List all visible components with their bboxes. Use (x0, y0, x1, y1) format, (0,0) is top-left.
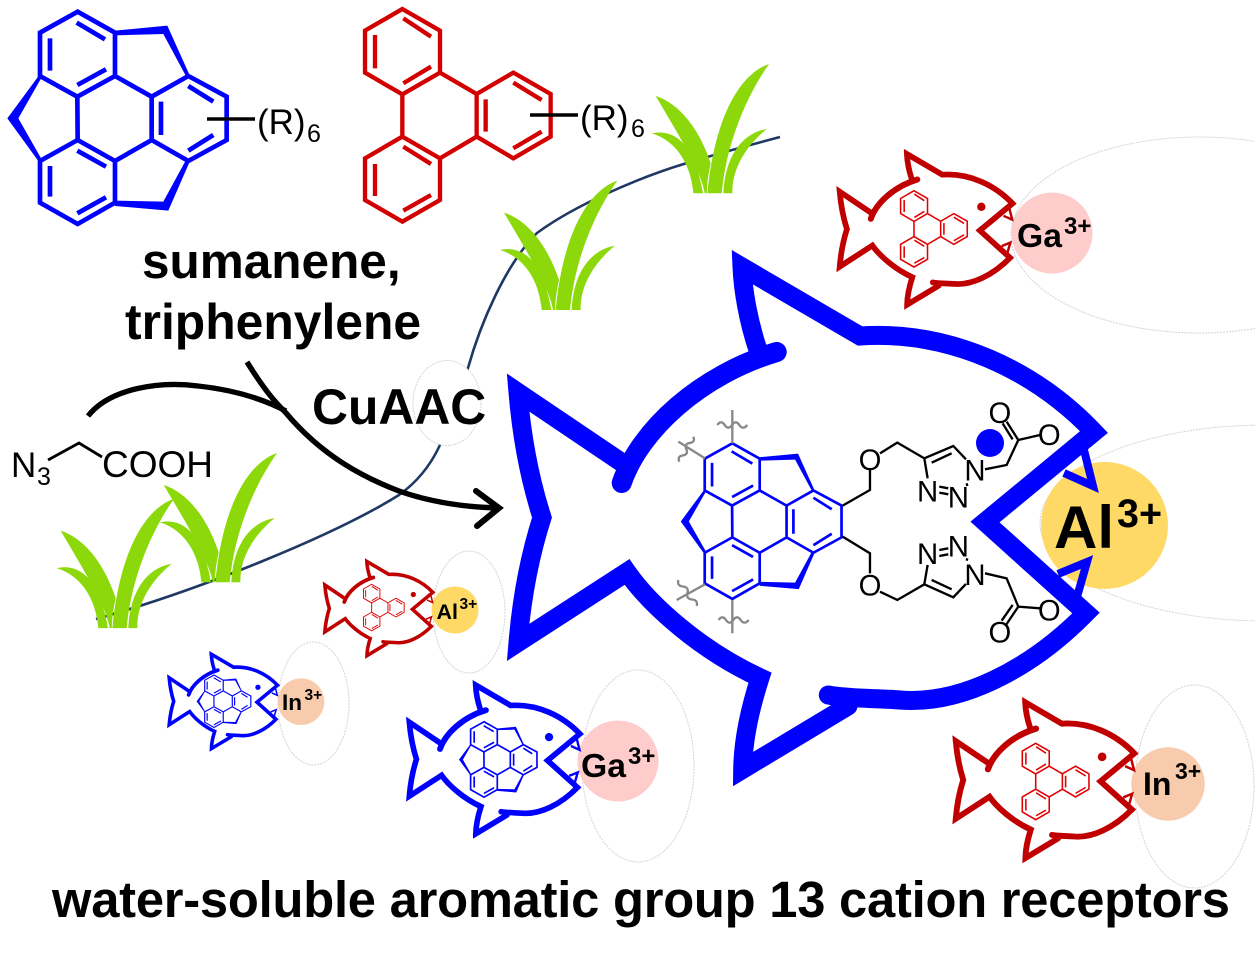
caption: water-soluble aromatic group 13 cation receptors (51, 871, 1230, 928)
atom labels: N (964, 455, 986, 488)
In3+ cation (1131, 747, 1205, 821)
red fish with Ga3+ (840, 154, 1092, 305)
Al3+ cation: 3+ (1117, 492, 1162, 536)
(R)6 label (580, 99, 645, 143)
Al3+ cation: Al (436, 600, 458, 624)
CuAAC ellipse (413, 360, 481, 446)
triphenylene structure (365, 9, 645, 222)
azidoacetic acid formula: COOH (102, 444, 213, 485)
Al3+ cation (432, 586, 478, 634)
grass clump: lower left (57, 499, 174, 628)
heading: sumanene, triphenylene: sumanene, (142, 234, 401, 289)
atom labels: N (917, 538, 938, 571)
sumanene core (681, 443, 842, 599)
atom labels: O (989, 397, 1011, 430)
Al3+ cation: Al (1054, 494, 1114, 561)
atom labels (859, 397, 1061, 649)
blue fish with Ga3+ (409, 685, 658, 834)
sumanene (459, 722, 537, 797)
reaction arrow (88, 362, 499, 526)
triphenylene (363, 584, 404, 631)
blue fish outline (409, 685, 580, 834)
CuAAC label: CuAAC (312, 379, 486, 435)
Ga3+ cation: 3+ (1064, 213, 1091, 240)
In3+ cation (278, 678, 324, 725)
grass clump: left (160, 453, 277, 582)
In3+ cation: In (282, 690, 302, 715)
atom labels: N (917, 475, 938, 508)
Ga3+ cation: Ga (581, 747, 626, 785)
blue fish with In3+ (169, 654, 324, 749)
red fish outline (956, 702, 1134, 858)
blue fish outline (169, 654, 277, 749)
azidoacetic acid formula: N (11, 446, 36, 485)
(R)6 label: (R) (580, 99, 629, 138)
(R)6 label: 6 (631, 115, 645, 143)
azidoacetic acid formula: 3 (37, 463, 51, 491)
substituent bond (530, 113, 578, 117)
atom labels: N (948, 481, 969, 514)
In3+ cation: 3+ (1175, 758, 1201, 784)
curved navy line (96, 137, 780, 619)
Ga3+ cation: 3+ (628, 743, 655, 770)
(R)6 label: 6 (307, 120, 321, 148)
Al3+ cation: 3+ (460, 596, 477, 613)
Ga3+ cation: Ga (1017, 217, 1062, 255)
dotted guide ellipses (278, 137, 1255, 888)
wavy substituents (677, 410, 749, 633)
side chains (843, 422, 1040, 625)
grass clump: upper right (652, 64, 769, 193)
Al3+ cation (1041, 462, 1168, 589)
substituent bond (207, 117, 255, 121)
sumanene (197, 675, 251, 727)
red fish outline (325, 561, 433, 656)
triphenylene (901, 191, 967, 267)
In3+ cation: 3+ (304, 687, 322, 704)
functionalized sumanene molecule (677, 397, 1061, 649)
atom labels: O (1038, 595, 1061, 628)
red fish with In3+ (956, 702, 1205, 858)
red fish outline (840, 154, 1012, 305)
In3+ cation: In (1143, 766, 1171, 802)
Ga3+ cation (1012, 192, 1092, 274)
grass clump: centre (500, 181, 617, 310)
red fish with Al3+ (325, 561, 478, 656)
atom labels: N (964, 559, 986, 592)
(R)6 label: (R) (257, 103, 306, 142)
sumanene structure (7, 12, 321, 224)
atom labels: O (989, 616, 1011, 649)
triphenylene (1022, 743, 1089, 820)
atom labels: O (859, 570, 881, 603)
atom labels: O (1038, 419, 1061, 452)
Ga3+ cation (578, 720, 658, 802)
heading: sumanene, triphenylene: triphenylene (125, 294, 421, 350)
big blue fish receptor with Al3+ (518, 267, 1168, 769)
atom labels: N (948, 531, 969, 564)
azidoacetic acid formula (11, 443, 213, 491)
heading: sumanene, triphenylene (125, 234, 421, 350)
(R)6 label (257, 103, 321, 148)
blue fish outline (518, 267, 1094, 769)
atom labels: O (859, 444, 881, 477)
